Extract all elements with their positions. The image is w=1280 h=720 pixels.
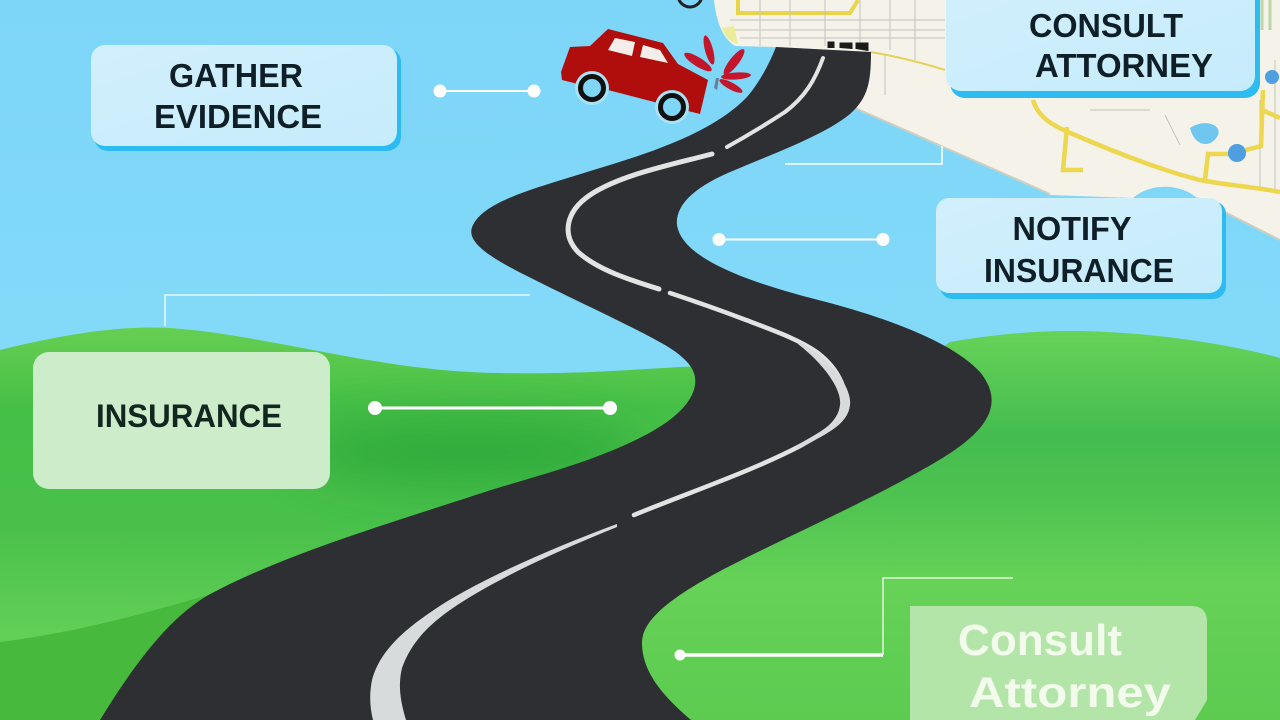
car body bbox=[561, 29, 708, 114]
card: gather evidence: GATHER bbox=[169, 57, 303, 94]
card: consult attorney upper: CONSULT bbox=[1029, 7, 1183, 44]
road end silhouettes bbox=[828, 42, 868, 51]
card: consult attorney upper: ATTORNEY bbox=[1035, 47, 1213, 84]
card: insurance: INSURANCE bbox=[96, 398, 282, 434]
tapered lower road line bbox=[370, 524, 617, 720]
red car crash icon bbox=[561, 29, 751, 124]
crash burst bbox=[682, 34, 751, 95]
winding road bbox=[100, 47, 992, 720]
connector: notify insurance bbox=[712, 233, 890, 246]
card: gather evidence bbox=[91, 45, 401, 151]
card: notify insurance: NOTIFY bbox=[1012, 210, 1132, 247]
left green hill bbox=[0, 327, 700, 720]
card: consult attorney lower bbox=[910, 606, 1207, 720]
card: notify insurance bbox=[936, 198, 1226, 299]
car windows bbox=[608, 38, 668, 63]
connector: insurance bbox=[368, 401, 617, 415]
connector: gather evidence bbox=[434, 84, 540, 98]
leader line upper right bbox=[785, 146, 942, 164]
card: consult attorney upper bbox=[946, 0, 1260, 98]
card: consult attorney lower: Attorney bbox=[969, 669, 1171, 717]
card: insurance bbox=[33, 352, 330, 489]
road line bend highlight bbox=[795, 342, 850, 450]
leader line left bbox=[165, 295, 530, 326]
road centre line bbox=[568, 58, 846, 515]
card: gather evidence: EVIDENCE bbox=[154, 98, 322, 135]
connector: consult attorney lower bbox=[674, 578, 1013, 660]
card: consult attorney lower: Consult bbox=[958, 616, 1122, 665]
coastal map bbox=[678, 0, 1280, 240]
car wheels bbox=[575, 71, 609, 105]
right green hill bbox=[600, 331, 1280, 720]
card: notify insurance: INSURANCE bbox=[984, 252, 1174, 289]
